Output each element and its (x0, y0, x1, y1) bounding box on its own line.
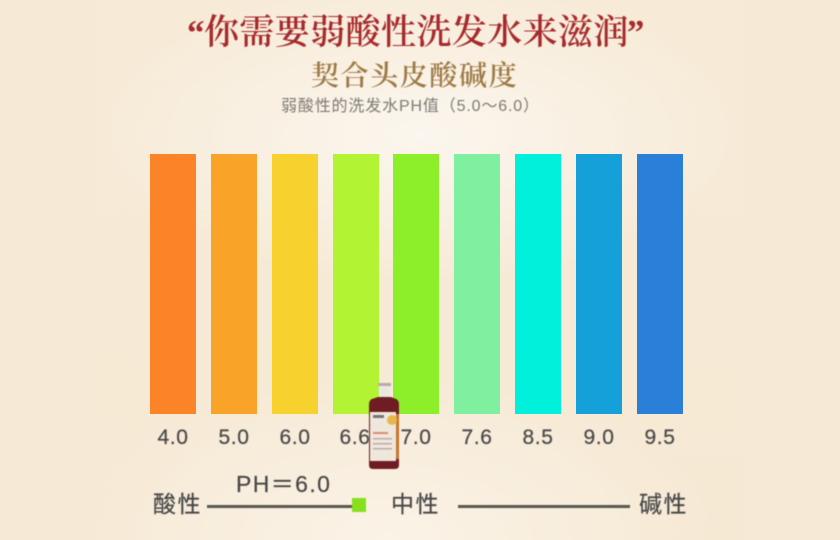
subtitle: 契合头皮酸碱度 (311, 61, 518, 92)
label 4.0: 4.0 (158, 426, 188, 449)
icon: shampoo bottle (368, 382, 400, 470)
label 9.0: 9.0 (584, 426, 614, 449)
caption: recommended pH range: 弱酸性的洗发水PH值（5.0～6.0） (281, 98, 540, 115)
label 6.0: 6.0 (280, 426, 310, 449)
label 9.5: 9.5 (644, 426, 676, 449)
bar 6.6 (333, 154, 379, 414)
pH scale labels (157, 426, 676, 449)
label 7.0: 7.0 (400, 426, 432, 449)
bar 4.0 (150, 154, 196, 414)
alkaline label: 碱性 (639, 491, 688, 517)
alkaline scale line (458, 505, 630, 508)
label 7.6: 7.6 (462, 426, 492, 449)
bar 7.6 (454, 154, 500, 414)
label 5.0: 5.0 (218, 426, 250, 449)
bar 5.0 (211, 154, 257, 414)
label 8.5: 8.5 (522, 426, 554, 449)
bar 6.0 (272, 154, 318, 414)
pH colour bars (150, 154, 683, 414)
acidic scale line (207, 505, 355, 508)
label 6.6: 6.6 (340, 426, 370, 449)
background panel (94, 0, 745, 540)
pH value callout: PH＝6.0 (236, 471, 331, 497)
acidic label: 酸性 (153, 491, 202, 517)
bar 9.0 (576, 154, 622, 414)
neutral label: 中性 (391, 491, 440, 517)
bar 8.5 (515, 154, 561, 414)
title: “你需要弱酸性洗发水来滋润” (187, 13, 645, 52)
bar 9.5 (637, 154, 683, 414)
pH 6.0 marker (352, 498, 366, 512)
bar 7.0 (393, 154, 439, 414)
